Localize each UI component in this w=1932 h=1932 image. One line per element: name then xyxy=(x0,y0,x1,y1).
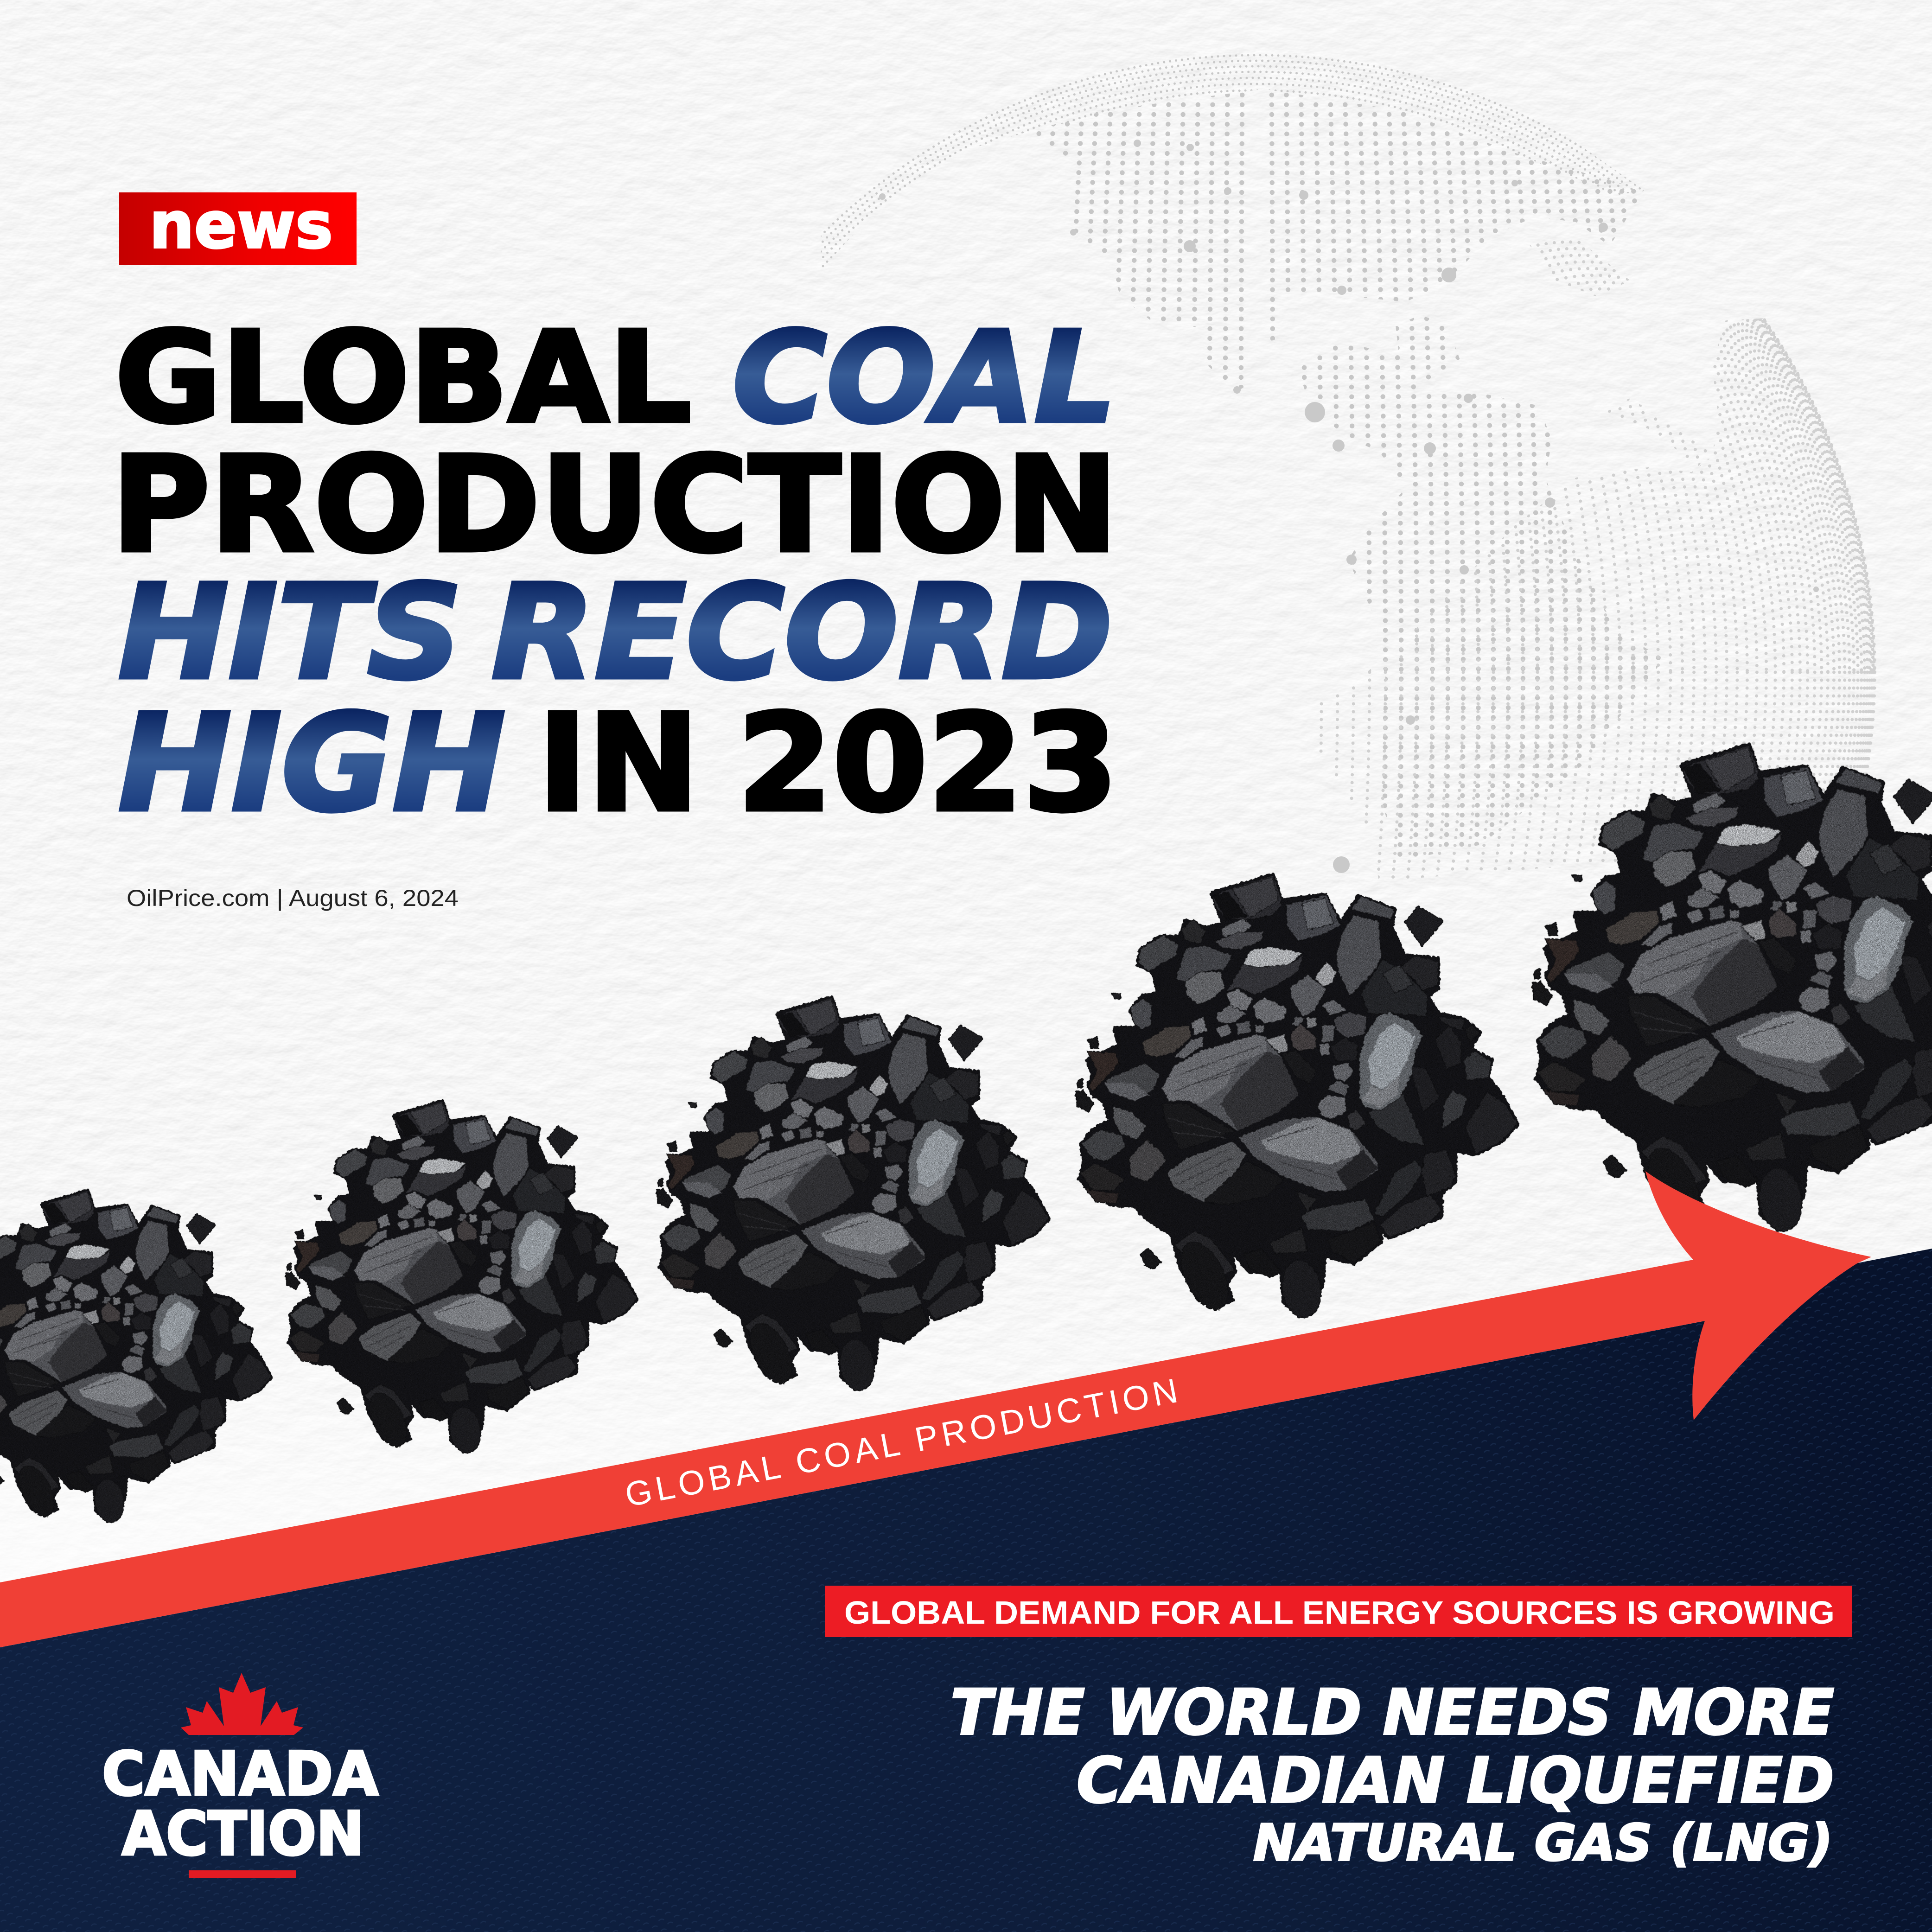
logo wordmark xyxy=(102,1739,378,1869)
title: HITS xyxy=(118,557,462,708)
logo underline xyxy=(189,1870,296,1878)
title: RECORD xyxy=(491,557,1113,708)
title: HIGH xyxy=(118,686,505,841)
closing message xyxy=(950,1676,1834,1872)
title: PRODUCTION xyxy=(111,428,1118,581)
closing message: NATURAL GAS (LNG) xyxy=(1253,1814,1833,1872)
callout banner xyxy=(825,1586,1852,1637)
source line: OilPrice.com | August 6, 2024 xyxy=(127,885,459,911)
coal pile 2 xyxy=(286,1101,637,1455)
arrow label: GLOBAL COAL PRODUCTION xyxy=(622,1371,1181,1514)
navy lower panel xyxy=(0,1249,1932,1932)
closing message: THE WORLD NEEDS MORE xyxy=(950,1676,1834,1749)
title: COAL xyxy=(733,305,1116,451)
title: 2023 xyxy=(737,686,1118,841)
coal pile 5 xyxy=(1532,745,1932,1234)
title xyxy=(111,305,1118,841)
logo wordmark: CANADA xyxy=(102,1739,378,1809)
coal pile 1 xyxy=(0,1191,271,1524)
dotted globe xyxy=(639,46,1875,1298)
callout banner: GLOBAL DEMAND FOR ALL ENERGY SOURCES IS GROWING xyxy=(844,1594,1835,1631)
title: IN xyxy=(538,686,699,841)
icon: maple leaf xyxy=(181,1673,303,1735)
coal pile 4 xyxy=(1076,875,1518,1320)
news tag: news xyxy=(149,188,333,263)
coal pile 3 xyxy=(657,998,1049,1393)
arrow: rising production xyxy=(0,1171,1871,1647)
title: GLOBAL xyxy=(115,305,691,451)
logo wordmark: ACTION xyxy=(122,1798,364,1869)
logo: Canada Action xyxy=(102,1673,378,1878)
closing message: CANADIAN LIQUEFIED xyxy=(1077,1744,1834,1817)
